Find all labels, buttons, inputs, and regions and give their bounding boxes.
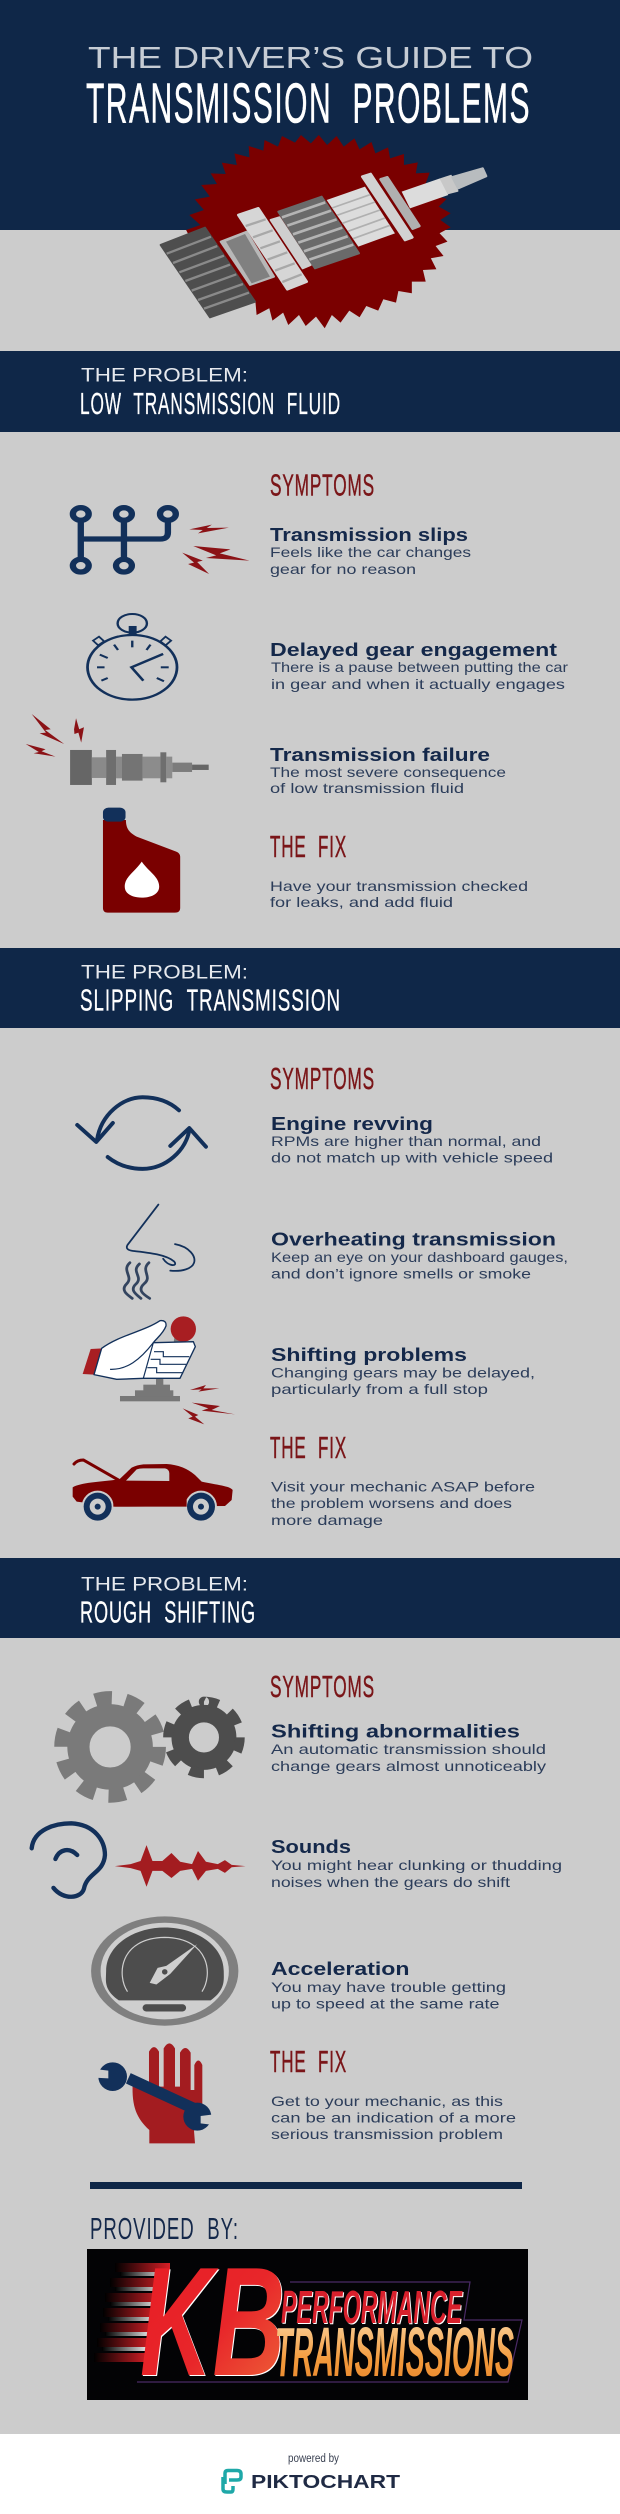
symptom: delayed gear engagement: in gear and when it actually engages	[271, 676, 565, 692]
fix text: Get to your mechanic, as this	[271, 2093, 503, 2109]
symptom: overheating transmission: Keep an eye on your dashboard gauges,	[271, 1249, 568, 1265]
banner: SLIPPING TRANSMISSION	[80, 982, 341, 1018]
fix text	[271, 1479, 535, 1528]
powered by: powered by	[288, 2453, 339, 2465]
heading: the fix: THE FIX	[270, 2044, 347, 2079]
heading: the fix: THE FIX	[270, 829, 347, 864]
symptom: overheating transmission: Overheating transmission	[271, 1230, 556, 1250]
symptom: shifting abnormalities: An automatic transmission should	[271, 1741, 546, 1757]
fix text: Visit your mechanic ASAP before	[271, 1479, 535, 1495]
symptom: sounds	[271, 1837, 562, 1890]
icon: speedometer	[91, 1916, 238, 2026]
symptom: transmission slips: Transmission slips	[270, 525, 468, 545]
banner: THE PROBLEM:	[81, 1574, 248, 1596]
title line 1: THE DRIVER’S GUIDE TO	[88, 40, 533, 75]
icon: gear shift pattern	[73, 508, 249, 574]
icon: gears	[62, 1699, 240, 1795]
logo: KB Performance Transmissions: KB	[140, 2235, 285, 2408]
symptom: transmission slips: Feels like the car changes	[270, 544, 471, 560]
icon: nose and smoke	[124, 1205, 194, 1298]
logo: KB Performance Transmissions: KB	[141, 2236, 286, 2409]
icon: car with open hood	[73, 1460, 233, 1523]
fix text	[270, 878, 528, 910]
symptom: transmission slips	[270, 525, 471, 577]
icon: hand with wrench	[89, 2043, 217, 2143]
symptom: transmission failure	[270, 745, 506, 796]
icon: failing transmission	[26, 714, 209, 785]
symptom: overheating transmission	[271, 1230, 568, 1282]
symptom: delayed gear engagement: There is a pause between putting the car	[271, 659, 568, 675]
banner: THE PROBLEM:	[81, 962, 248, 984]
banner: ROUGH SHIFTING	[80, 1595, 256, 1630]
symptom: overheating transmission: and don’t ignore smells or smoke	[271, 1266, 531, 1282]
symptom: shifting problems: Shifting problems	[271, 1345, 467, 1365]
panel: slipping transmission	[0, 948, 620, 1528]
icon: piktochart logo	[223, 2470, 241, 2492]
heading: symptoms: SYMPTOMS	[270, 1061, 375, 1096]
fix text: for leaks, and add fluid	[270, 894, 453, 910]
panel: footer	[0, 2434, 620, 2514]
heading: symptoms: SYMPTOMS	[270, 468, 375, 502]
symptom: engine revving: RPMs are higher than normal, and	[271, 1133, 541, 1149]
fix text: the problem worsens and does	[271, 1495, 512, 1511]
wordmark: PIKTOCHART	[251, 2472, 400, 2492]
icon: revving arrows	[77, 1097, 206, 1169]
fix text: Have your transmission checked	[270, 878, 528, 894]
symptom: shifting abnormalities	[271, 1722, 546, 1774]
fix text: serious transmission problem	[271, 2126, 503, 2142]
symptom: shifting problems: Changing gears may be delayed,	[271, 1365, 535, 1381]
icon: stopwatch	[88, 614, 177, 700]
heading: the fix: THE FIX	[270, 1430, 347, 1465]
symptom: sounds: noises when the gears do shift	[271, 1874, 510, 1890]
symptom: engine revving: do not match up with vehicle speed	[271, 1150, 553, 1166]
symptom: sounds: You might hear clunking or thudding	[271, 1857, 562, 1873]
symptom: shifting abnormalities: Shifting abnormalities	[271, 1722, 520, 1742]
symptom: sounds: Sounds	[271, 1837, 351, 1857]
logo: KB Performance Transmissions	[87, 2235, 528, 2409]
speed lines	[94, 2263, 170, 2362]
symptom: engine revving	[271, 1114, 553, 1166]
fix text: can be an indication of a more	[271, 2110, 516, 2126]
heading: symptoms: SYMPTOMS	[270, 1669, 375, 1704]
symptom: shifting problems	[271, 1345, 535, 1397]
symptom: shifting problems: particularly from a full stop	[271, 1381, 488, 1397]
panel: header	[0, 0, 620, 328]
panel: rough shifting	[0, 1558, 620, 2143]
banner: LOW TRANSMISSION FLUID	[80, 386, 341, 421]
banner	[0, 1558, 620, 1638]
fix text: more damage	[271, 1512, 383, 1528]
fix text	[271, 2093, 516, 2142]
symptom: acceleration	[271, 1959, 506, 2012]
banner: THE PROBLEM:	[81, 366, 248, 387]
icon: hand on shifter	[83, 1316, 235, 1424]
symptom: delayed gear engagement: Delayed gear engagement	[270, 640, 557, 660]
heading: provided by: PROVIDED BY:	[90, 2211, 239, 2246]
symptom: engine revving: Engine revving	[271, 1114, 433, 1134]
symptom: transmission failure: The most severe consequence	[270, 764, 506, 780]
banner	[0, 948, 620, 1028]
icon: transmission on red burst	[161, 135, 486, 328]
symptom: delayed gear engagement	[270, 640, 568, 692]
symptom: transmission failure: Transmission failure	[270, 745, 490, 765]
panel: low transmission fluid	[0, 351, 620, 913]
symptom: acceleration: Acceleration	[271, 1959, 410, 1979]
symptom: acceleration: You may have trouble getting	[271, 1979, 506, 1995]
icon: ear and sound wave	[32, 1823, 246, 1897]
symptom: shifting abnormalities: change gears almost unnoticeably	[271, 1758, 546, 1774]
icon: oil jug	[103, 808, 180, 913]
symptom: transmission failure: of low transmission fluid	[270, 780, 464, 796]
symptom: acceleration: up to speed at the same rate	[271, 1996, 500, 2012]
symptom: transmission slips: gear for no reason	[270, 561, 416, 577]
banner	[0, 351, 620, 432]
